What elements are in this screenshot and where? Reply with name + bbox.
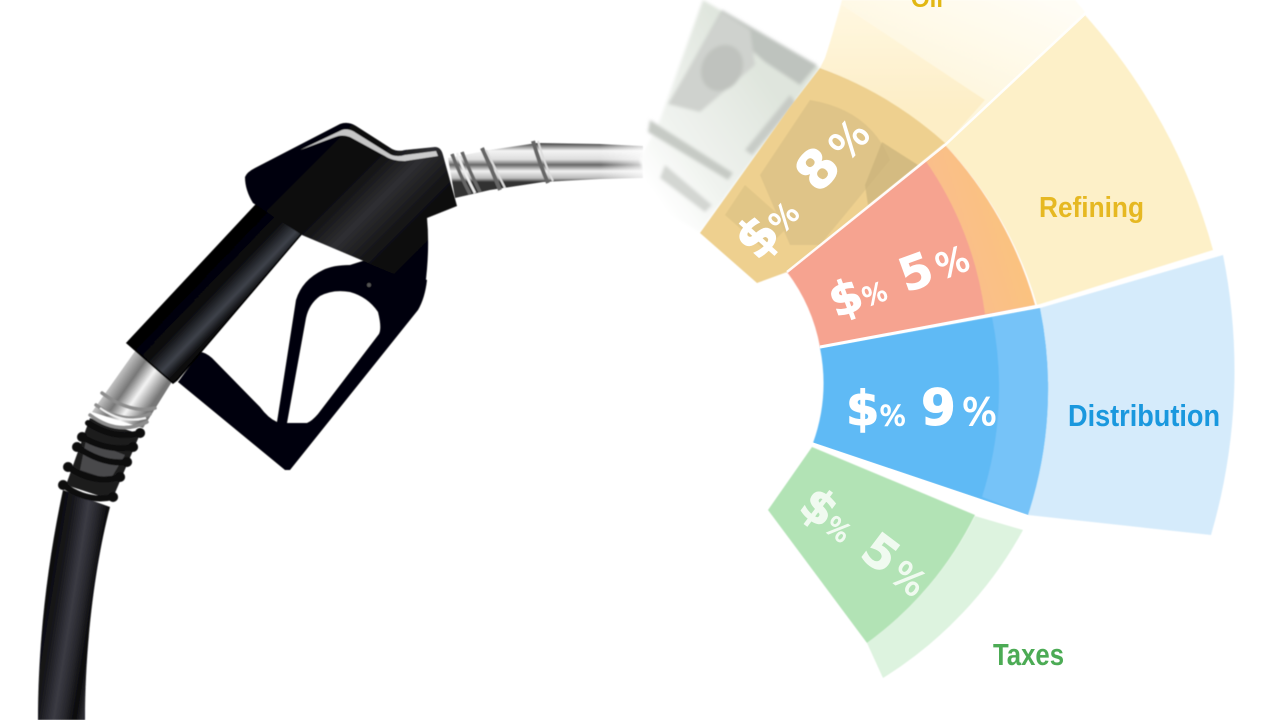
text: refining label: Refining	[1039, 192, 1144, 224]
nozzle body	[245, 123, 457, 287]
bill engraving	[648, 10, 817, 212]
panel: taxes cost segment	[768, 447, 1023, 678]
panel: refining cost segment	[787, 145, 1035, 347]
trigger guard	[178, 258, 427, 470]
panel: dollar bills	[640, 0, 820, 232]
grip tube	[127, 190, 315, 383]
text: distribution percent: $% 9%	[846, 379, 997, 437]
text: distribution label: Distribution	[1068, 398, 1220, 433]
panel: distribution cost segment	[813, 308, 1048, 515]
metal collar	[90, 347, 178, 428]
nozzle handle and trigger	[127, 123, 457, 470]
refining orange band	[925, 145, 1035, 314]
text: refining percent: $%5%	[821, 228, 976, 328]
body highlight	[300, 129, 438, 161]
ribbed hose coupling	[63, 418, 140, 500]
distribution lighter band	[982, 308, 1048, 515]
panel: distribution label segment	[1028, 255, 1234, 535]
metal spout	[448, 140, 648, 198]
panel: oil cost segment	[700, 68, 945, 283]
text: taxes label: Taxes	[993, 637, 1064, 672]
taxes lighter band	[867, 516, 1023, 678]
text: oil percent: $%8%	[723, 104, 882, 271]
text: taxes percent: $%5%	[790, 476, 940, 607]
panel: refining segment	[945, 14, 1213, 305]
fan chart of fuel price breakdown	[640, 0, 1234, 678]
panel: oil label segment	[820, 0, 1085, 145]
fuel hose	[38, 347, 178, 720]
spout rings	[452, 141, 553, 194]
